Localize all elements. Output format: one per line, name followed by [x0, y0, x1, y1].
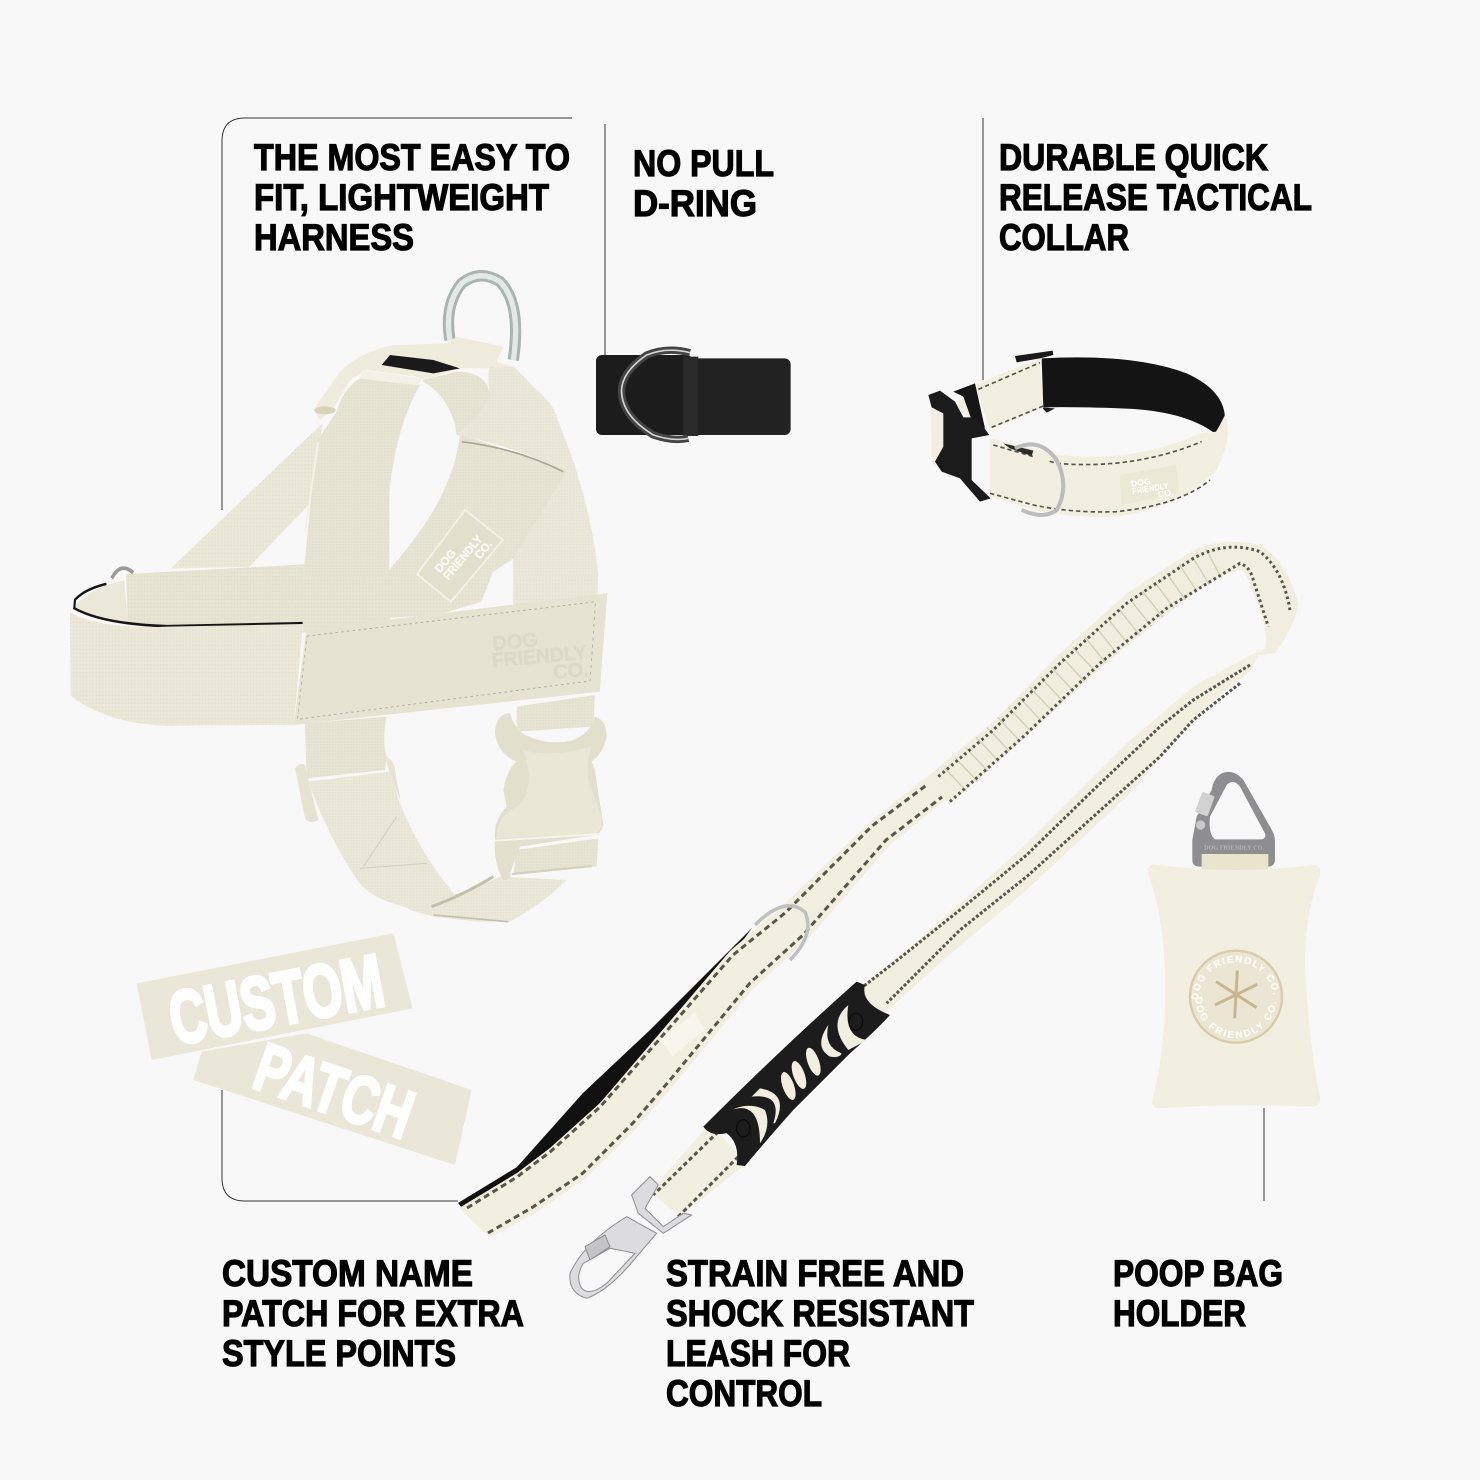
collar neoprene lining [1042, 357, 1225, 433]
neoprene handle underside [458, 928, 752, 1212]
heading: custom patch: PATCH FOR EXTRA [222, 1293, 524, 1334]
round logo patch [1188, 950, 1284, 1044]
carabiner [1192, 772, 1275, 872]
lower harness straps and buckle [295, 695, 607, 922]
handle and main strap [459, 778, 945, 1238]
custom name patches [137, 933, 472, 1165]
lower strap [650, 1123, 747, 1218]
rear webbing [975, 358, 1043, 430]
printed leather logo: FRIENDLY [491, 642, 588, 672]
heading: leash: CONTROL [666, 1373, 822, 1414]
rear harness webbing [74, 423, 598, 633]
heading: harness: THE MOST EASY TO [254, 137, 570, 178]
heading: harness [254, 137, 570, 258]
collar label [1120, 465, 1178, 505]
pouch body [1148, 865, 1320, 1108]
patch: CUSTOM: CUSTOM [162, 938, 390, 1061]
harness upper straps [303, 337, 598, 577]
poop bag holder illustration [1148, 772, 1320, 1108]
heading: collar: RELEASE TACTICAL [999, 177, 1312, 218]
patch: PATCH: PATCH [245, 1029, 423, 1154]
woven label [417, 510, 503, 602]
black velcro patch with D-ring [596, 350, 791, 439]
heading: harness: HARNESS [254, 217, 414, 258]
heading: custom patch: STYLE POINTS [222, 1333, 456, 1374]
collar label: FRIENDLY [1131, 480, 1169, 496]
connector: D-ring [604, 124, 606, 356]
collar D-ring [1015, 444, 1063, 515]
woven label logo [433, 524, 495, 589]
woven label logo: CO. [473, 539, 495, 562]
carabiner: DOG FRIENDLY CO. [1204, 844, 1264, 851]
heading: leash: STRAIN FREE AND [666, 1253, 964, 1294]
heading: D-ring: D-RING [633, 183, 757, 224]
printed leather logo: CO. [552, 659, 590, 684]
harness illustration [70, 276, 607, 922]
bungee leash illustration [458, 542, 1298, 1298]
quick release buckle [928, 391, 991, 502]
belly band and leather panel [70, 593, 607, 726]
inner webbing wedge [955, 395, 977, 420]
heading: collar [999, 137, 1312, 258]
heading: leash: LEASH FOR [666, 1333, 850, 1374]
heading: collar: DURABLE QUICK [999, 137, 1268, 178]
silicone moon phase grip [703, 982, 890, 1166]
heading: poop bag holder: POOP BAG [1113, 1253, 1283, 1294]
heading: custom patch: CUSTOM NAME [222, 1253, 473, 1294]
heading: harness: FIT, LIGHTWEIGHT [254, 177, 549, 218]
heading: leash [666, 1253, 974, 1414]
patch: CUSTOM [137, 933, 413, 1061]
connector: poop bag holder [1263, 1108, 1265, 1201]
left webbing end [931, 408, 945, 468]
return strap [840, 650, 1260, 1030]
top clip [1015, 351, 1055, 413]
heading: poop bag holder [1113, 1253, 1283, 1334]
printed leather logo: DOG [491, 629, 539, 655]
heading: collar: COLLAR [999, 217, 1129, 258]
collar label: DOG [1130, 476, 1152, 489]
connector: patch to leash bracket bottom [222, 1090, 458, 1201]
collar illustration [928, 351, 1228, 517]
leash O-ring [755, 906, 808, 960]
bungee section and return strap [840, 542, 1298, 1030]
collar label: CO. [1157, 487, 1174, 499]
woven label logo: DOG [433, 548, 459, 575]
heading: custom patch [222, 1253, 524, 1374]
woven label logo: FRIENDLY [441, 533, 486, 582]
heading: leash: SHOCK RESISTANT [666, 1293, 974, 1334]
black strap [953, 383, 985, 428]
round logo patch: DOG FRIENDLY CO. [1192, 955, 1278, 1000]
swivel clasp [570, 1177, 692, 1298]
heading: D-ring [633, 143, 774, 224]
bungee ribs [955, 562, 1217, 780]
front collar band [990, 415, 1228, 517]
harness D-ring [448, 276, 516, 360]
heading: D-ring: NO PULL [633, 143, 774, 184]
printed leather logo [489, 625, 590, 689]
connector: harness and patch bracket top [222, 118, 572, 510]
round logo patch: DOG FRIENDLY CO. [1195, 997, 1276, 1038]
connector: collar [982, 118, 984, 380]
heading: poop bag holder: HOLDER [1113, 1293, 1246, 1334]
